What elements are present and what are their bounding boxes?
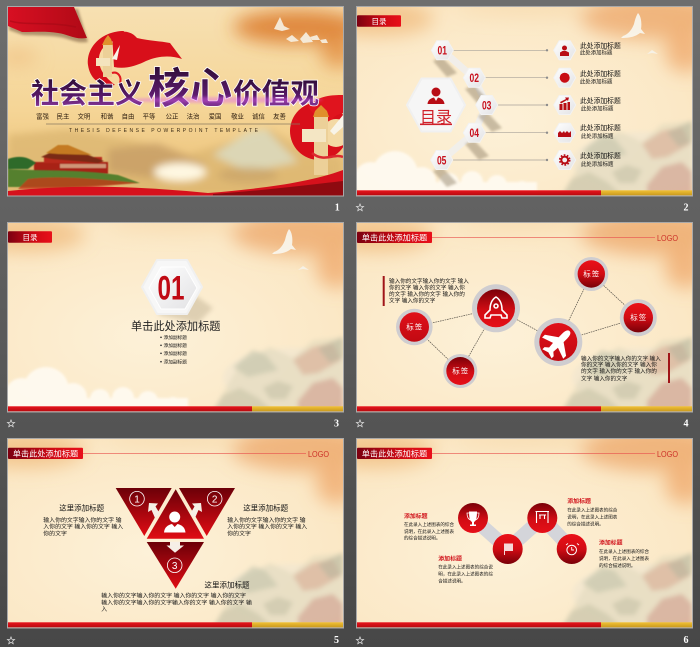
values row: 平等 — [143, 112, 156, 120]
item 01: 01 — [438, 44, 447, 58]
text block 3: 输入你的文字输入你的文字输入你的文字 输入你的文字 输 — [101, 598, 252, 606]
icon: people — [560, 46, 569, 56]
text block 1: 在此录入上述图表的综合 — [404, 521, 454, 528]
text block 3: 输入你的文字输入你的文字 输入你的文字 输入你的文字 — [101, 592, 246, 600]
page numbers: 4 — [684, 418, 688, 430]
item 02: 此处添加标题 — [580, 69, 621, 78]
text block 1 — [404, 512, 454, 542]
icon: rocket — [485, 297, 507, 318]
doves — [274, 17, 328, 43]
slide 6: wave diagram — [356, 438, 693, 628]
triangle 3: 3 — [172, 561, 178, 572]
text block right — [581, 353, 670, 383]
text block 2 — [438, 554, 493, 585]
triangle 3 — [147, 542, 204, 589]
item 03 — [476, 96, 621, 132]
right column with ribbon — [290, 95, 343, 175]
bullet list: 添加副标题 — [164, 334, 187, 341]
node 3: gate — [527, 503, 557, 533]
label node right: 标签 — [630, 312, 647, 322]
item 05: 此处添加标题 — [581, 160, 614, 168]
item 03: 03 — [482, 98, 492, 112]
text block 1: 你的文字 — [43, 529, 67, 537]
greenery and flowers — [8, 157, 140, 189]
transition star icons — [7, 204, 364, 644]
item 01: 此处添加标题 — [580, 49, 613, 57]
contents tag — [8, 231, 52, 243]
left column with ribbon — [88, 31, 182, 85]
orange sky texture — [0, 10, 363, 68]
text block 1: 的综合描述说明。 — [404, 535, 440, 542]
node 4: alarm clock — [557, 534, 587, 564]
text block right: 输入你的文字输入你的文字 输入 — [581, 354, 661, 362]
triangle 2: 2 — [212, 494, 218, 506]
values row: 公正 — [166, 112, 179, 120]
text block left: 的文字 输入你的文字 输入你的 — [389, 290, 465, 298]
contents tag: 目录 — [22, 233, 38, 242]
values row: 文明 — [78, 112, 90, 120]
page numbers: 2 — [684, 202, 688, 214]
triangle 1 — [116, 488, 172, 536]
triangle 1: 1 — [134, 494, 140, 506]
text block 1: 这里添加标题 — [59, 502, 105, 512]
values row — [36, 113, 286, 120]
grey connectors — [473, 518, 572, 549]
main title: 核心 — [148, 65, 232, 112]
section title: 单击此处添加标题 — [131, 319, 220, 333]
header bar — [357, 448, 678, 459]
text block left — [383, 276, 469, 306]
node 1: trophy — [458, 503, 488, 533]
text block 2 — [227, 502, 307, 537]
text block right: 你的文字 输入你的文字 输入你 — [581, 361, 657, 369]
red ribbon along the bottom — [8, 170, 343, 196]
item 05 — [431, 150, 621, 187]
item 02: 02 — [470, 71, 479, 85]
icon: plane — [536, 321, 580, 364]
section number hexagon — [142, 260, 213, 323]
text block 2: 明，在此录入上述图表的综 — [438, 571, 493, 578]
subtitle: THESIS DEFENSE POWERPOINT TEMPLATE — [69, 128, 259, 134]
text block 4 — [599, 538, 649, 569]
icon: bar chart — [560, 98, 570, 110]
text block 3: 添加标题 — [567, 497, 591, 505]
bullet list: 添加副标题 — [164, 358, 187, 365]
values row: 诚信 — [252, 112, 265, 120]
slide 1: cover — [0, 6, 363, 196]
text block 2: 这里添加标题 — [243, 502, 289, 512]
landscape — [8, 129, 343, 195]
values row: 自由 — [122, 112, 134, 120]
item 02: 此处添加标题 — [580, 78, 613, 86]
connector band — [442, 50, 487, 160]
values row: 法治 — [187, 112, 200, 120]
text block right: 的文字 输入你的文字 输入你的 — [581, 367, 657, 375]
text block 4: 在此录入上述图表的综合 — [599, 548, 649, 555]
values row: 民主 — [57, 112, 70, 120]
item 03: 此处添加标题 — [581, 104, 614, 112]
icon: gear — [560, 155, 570, 165]
text block left: 文字 输入你的文字 — [389, 296, 436, 304]
item 05: 此处添加标题 — [580, 151, 621, 160]
item 01 — [431, 41, 621, 77]
text block 3: 这里添加标题 — [204, 579, 250, 589]
rocket node — [472, 284, 520, 332]
icon: person — [428, 88, 444, 104]
text block 2: 输入你的文字输入你的文字 输 — [227, 516, 306, 524]
main title: 社会主义 — [31, 78, 143, 109]
text block left: 你的文字 输入你的文字 输入你 — [389, 283, 465, 291]
text block 2: 在此录入上述图表的综合说 — [438, 564, 493, 571]
page numbers: 1 — [335, 202, 340, 214]
arrows — [148, 503, 202, 553]
text block right: 文字 输入你的文字 — [581, 374, 628, 382]
page numbers: 6 — [684, 635, 688, 646]
text block 3 — [567, 497, 618, 527]
text block left: 输入你的文字输入你的文字 输入 — [389, 277, 469, 285]
label node right — [620, 299, 657, 336]
label node bottom — [443, 354, 477, 388]
text block 3: 说明，在此录入上述图表 — [567, 513, 618, 520]
text block 1 — [43, 502, 123, 537]
label node left: 标签 — [406, 322, 423, 332]
item 04: 04 — [470, 126, 479, 140]
text block 2: 你的文字 — [227, 529, 251, 537]
plane node — [534, 318, 582, 366]
item 03: 此处添加标题 — [580, 96, 621, 105]
dashed links — [414, 274, 638, 371]
triangle 2 — [179, 488, 235, 536]
large contents hexagon: 目录 — [420, 108, 452, 126]
contents tag: 目录 — [372, 17, 387, 26]
text block 2: 入你的文字 输入你的文字 输入 — [227, 522, 307, 530]
text block 1: 说明，在此录入上述图表 — [404, 528, 454, 535]
centre triangle with person — [147, 489, 204, 539]
contents tag — [357, 15, 401, 27]
section number hexagon: 01 — [158, 270, 184, 308]
values row: 和谐 — [101, 112, 114, 120]
node 2: flag — [493, 534, 523, 564]
slide 4: network diagram — [356, 222, 693, 412]
values row: 友善 — [273, 112, 286, 120]
item 02 — [463, 68, 621, 105]
text block 2: 添加标题 — [438, 554, 462, 562]
text block 3: 入 — [101, 606, 107, 613]
item 04 — [463, 123, 621, 160]
item 04: 此处添加标题 — [580, 123, 621, 132]
bullet list: 添加副标题 — [164, 342, 187, 349]
icon: pie chart — [560, 73, 570, 83]
slide 3: section page — [7, 222, 344, 412]
item 05: 05 — [437, 153, 447, 167]
text block 4: 的综合描述说明。 — [599, 562, 635, 569]
item 04: 此处添加标题 — [581, 132, 614, 140]
text block 1: 入你的文字 输入你的文字 输入 — [43, 522, 123, 530]
text block 3 — [101, 579, 252, 613]
icon: handshake group — [558, 131, 571, 137]
red flag top left — [8, 7, 88, 42]
page numbers: 3 — [334, 418, 339, 430]
purple glow — [123, 97, 323, 103]
label node top: 标签 — [583, 268, 600, 278]
page numbers: 5 — [334, 635, 339, 646]
main title: 价值观 — [233, 78, 319, 109]
bullet list: 添加副标题 — [164, 350, 187, 357]
values row: 富强 — [36, 112, 49, 120]
main title — [31, 65, 319, 112]
bullet list — [160, 334, 187, 365]
slide 2: contents — [356, 6, 693, 196]
text block 1: 输入你的文字输入你的文字 输 — [43, 516, 122, 524]
text block 3: 的综合描述说明。 — [567, 520, 604, 527]
label node left — [396, 309, 433, 345]
item 01: 此处添加标题 — [580, 41, 621, 50]
text block 3: 在此录入上述图表的综合 — [567, 507, 618, 514]
Tiananmen gate — [34, 145, 108, 174]
slide 5: triangle diagram — [7, 438, 344, 628]
header bar — [8, 448, 329, 459]
values row: 爱国 — [209, 112, 221, 120]
label node top — [574, 257, 608, 291]
large contents hexagon — [407, 78, 465, 132]
label node bottom: 标签 — [452, 366, 469, 376]
text block 2: 合描述说明。 — [438, 578, 466, 585]
text block 4: 添加标题 — [599, 538, 623, 546]
text block 1: 添加标题 — [404, 512, 428, 520]
header bar — [357, 232, 678, 243]
text block 4: 说明，在此录入上述图表 — [599, 555, 649, 562]
values row: 敬业 — [231, 112, 244, 120]
page numbers — [334, 202, 688, 646]
